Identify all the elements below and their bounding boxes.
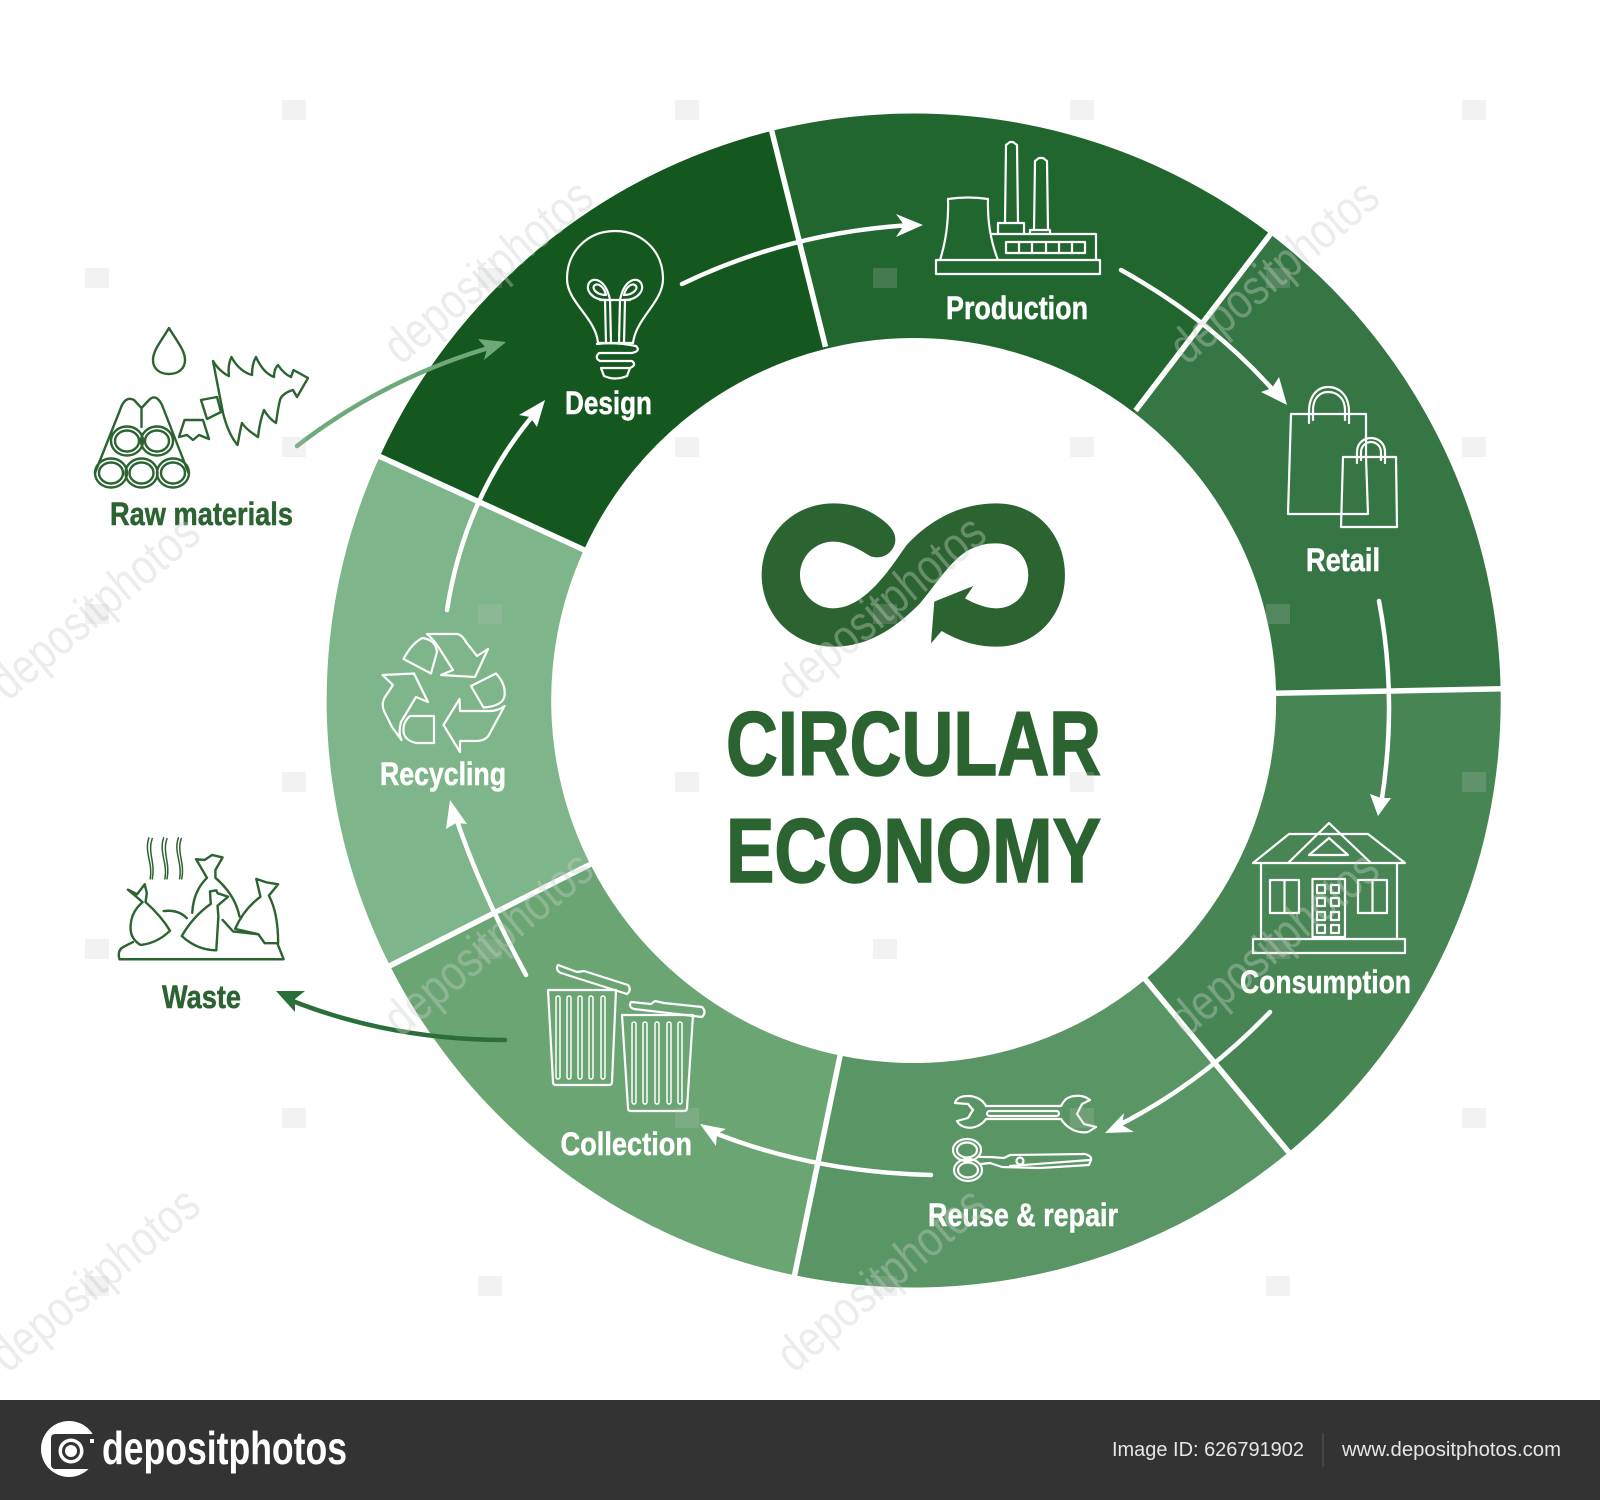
segment: consumption: [1145, 689, 1501, 1152]
arrow: collection to waste: [276, 991, 505, 1040]
segment: retail: [1134, 234, 1501, 693]
watermark camera marks: [85, 100, 1486, 1296]
arrow: consumption to reuse: [1105, 1012, 1270, 1133]
website: www.depositphotos.com: [1341, 1439, 1561, 1461]
label: retail: Retail: [1306, 542, 1380, 578]
segment: design: [380, 131, 826, 550]
icon: wrench and scissors: [953, 1096, 1096, 1181]
arrow: production to retail: [1121, 270, 1287, 405]
icon: house: [1253, 823, 1405, 953]
segment: reuse and repair: [795, 979, 1289, 1288]
title: circular economy: CIRCULAR: [726, 694, 1101, 795]
label: design: Design: [565, 385, 652, 421]
watermark text: depositphotos: [765, 504, 996, 710]
watermark text: depositphotos: [765, 1176, 996, 1382]
circular ring of seven segments: [327, 113, 1503, 1288]
label: raw materials: Raw materials: [110, 496, 293, 532]
icon: trash bins: [548, 965, 704, 1111]
label: collection: Collection: [560, 1126, 692, 1162]
arrow: reuse to collection: [700, 1124, 931, 1175]
footer bar: [0, 1400, 1600, 1500]
title: circular economy: [726, 694, 1101, 902]
footer logo wordmark: depositphotos: [102, 1422, 347, 1474]
watermark text: [0, 168, 1389, 1382]
icon: shopping bags: [1288, 387, 1397, 527]
watermark text: depositphotos: [1158, 840, 1389, 1046]
icon: recycling symbol: [382, 634, 505, 752]
title: circular economy: ECONOMY: [726, 801, 1101, 902]
watermark text: depositphotos: [372, 168, 603, 374]
icon: raw materials: [95, 328, 308, 488]
watermark text: depositphotos: [372, 840, 603, 1046]
watermark text: depositphotos: [1158, 168, 1389, 374]
arrow: retail to consumption: [1370, 601, 1391, 816]
image id: Image ID: 626791902: [1112, 1439, 1304, 1461]
label: consumption: Consumption: [1240, 964, 1411, 1000]
arrow: raw materials to design: [297, 339, 506, 446]
label: waste: Waste: [162, 979, 241, 1015]
icon: factory: [936, 142, 1100, 274]
segment: collection: [390, 864, 840, 1275]
segment: production: [772, 113, 1270, 413]
icon: waste bags: [119, 838, 284, 959]
label: recycling: Recycling: [380, 756, 506, 792]
icon: light bulb: [567, 231, 663, 378]
arrow: recycling to design: [447, 400, 545, 610]
arrow: design to production: [682, 214, 923, 284]
segment: recycling: [327, 456, 590, 966]
label: reuse and repair: Reuse & repair: [928, 1197, 1118, 1233]
footer logo icon: [41, 1421, 97, 1477]
icon: infinity loop logo: [762, 503, 1065, 647]
arrow: collection to recycling: [446, 800, 526, 975]
label: production: Production: [946, 290, 1088, 326]
